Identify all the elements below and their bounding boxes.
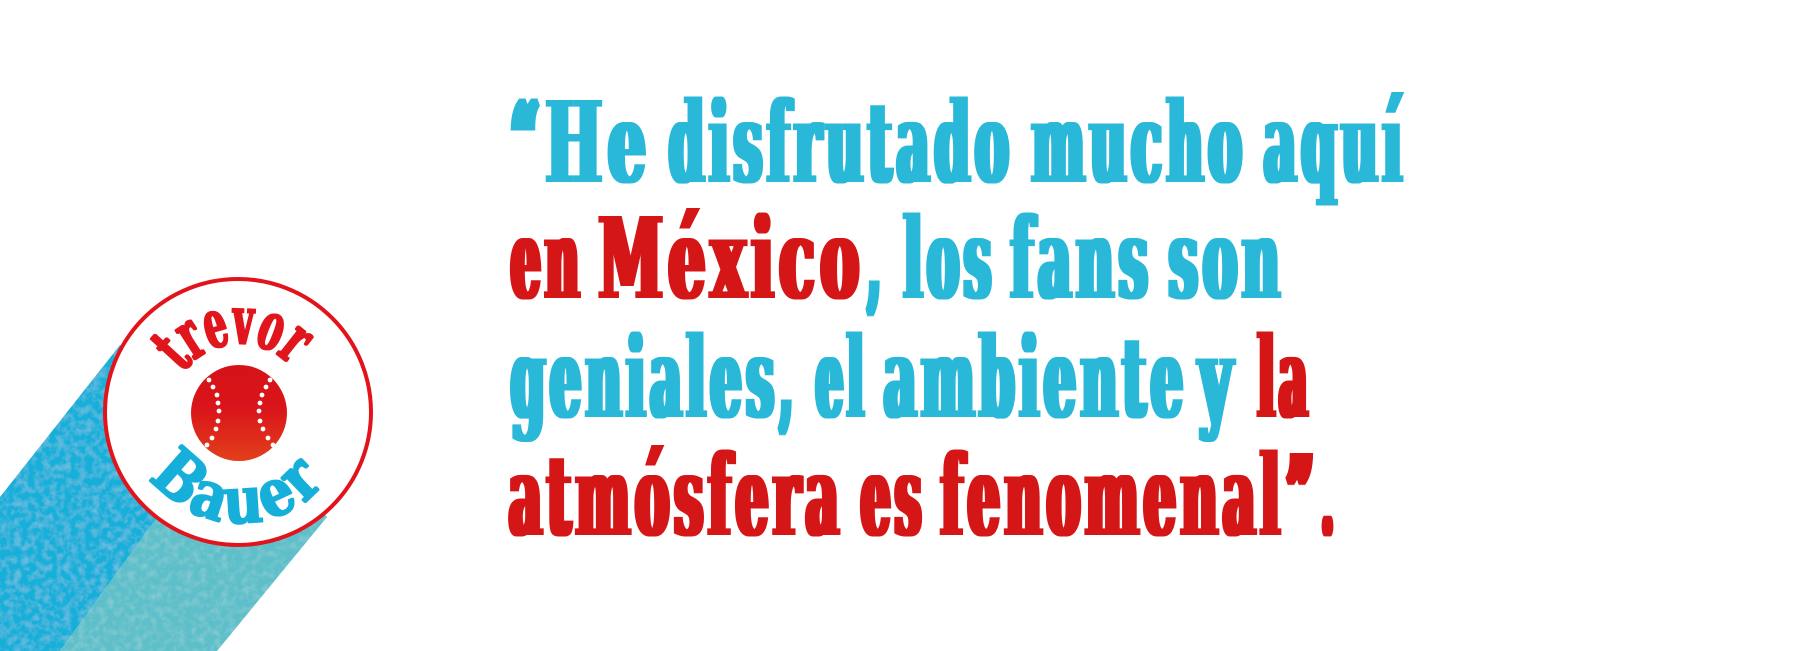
quote line 4: atmósfera <box>509 431 844 562</box>
quote line 1: He <box>546 78 652 209</box>
quote line 2: México <box>599 194 865 325</box>
quote line 3: geniales <box>511 313 779 444</box>
long shadow: light teal band <box>60 412 327 651</box>
quote line 1: mucho <box>1032 78 1247 209</box>
quote line 2 <box>511 194 1285 325</box>
quote text: son <box>1169 194 1285 325</box>
quote line 1: “ <box>510 78 540 209</box>
quote line 2: los <box>904 194 996 325</box>
long shadow: dark blue band <box>0 345 238 651</box>
quote line 3: ambiente <box>884 313 1188 444</box>
badge: Trevor Bauer baseball logo <box>103 277 373 547</box>
icon: baseball <box>191 365 287 461</box>
quote line 2: fans <box>1011 194 1153 325</box>
quote line 4: fenomenal <box>941 431 1285 562</box>
badge text: trevor: trevor <box>150 308 314 369</box>
quote line 4: es <box>861 431 926 562</box>
quote line 3: y <box>1198 313 1238 444</box>
quote line 4: ” <box>1286 431 1314 562</box>
badge text: Bauer: Bauer <box>148 444 320 525</box>
quote line 2: en <box>511 194 584 325</box>
quote text: . <box>1322 431 1333 562</box>
quote line 2: , <box>868 194 880 325</box>
quote text <box>509 78 1407 562</box>
quote line 3: el <box>816 313 868 444</box>
quote line 1: disfrutado <box>669 78 1014 209</box>
quote line 3: , <box>780 313 792 444</box>
badge ring <box>105 279 371 545</box>
infographic canvas: aquí <box>1264 78 1407 209</box>
quote text: la <box>1258 313 1312 444</box>
